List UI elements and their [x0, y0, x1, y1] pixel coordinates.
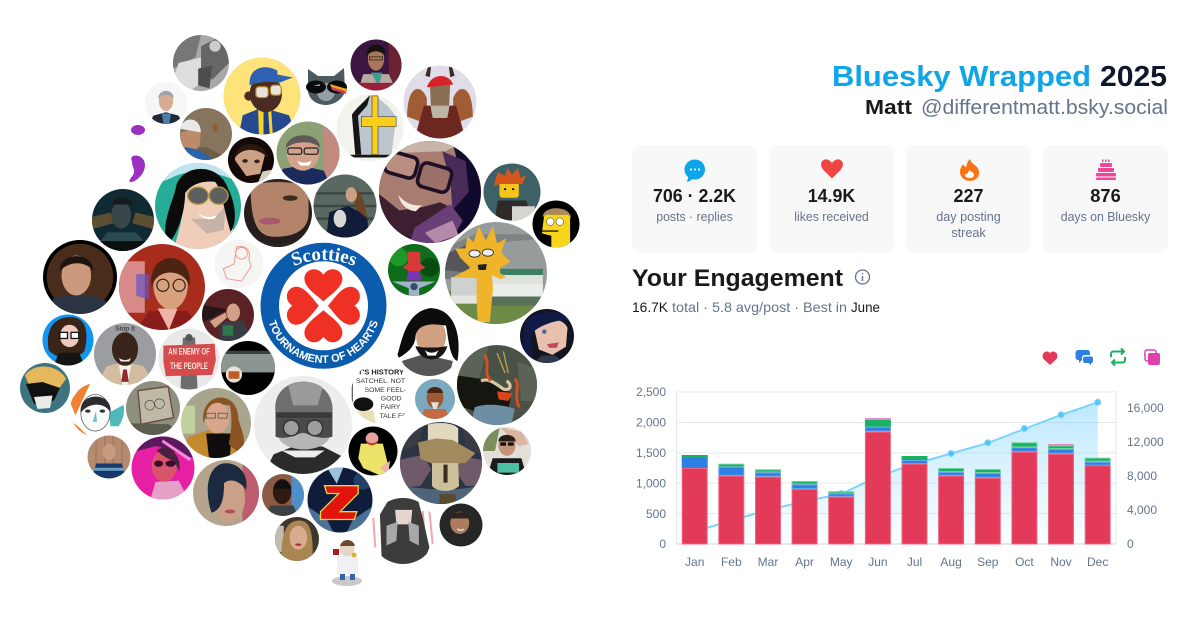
month labels: Oct: [1015, 555, 1034, 569]
icon: four red hearts: [287, 269, 360, 342]
title: Bluesky Wrapped: [832, 61, 1091, 93]
avatar: gray cat photo: [173, 35, 229, 91]
engagement summary: 16.7K: [632, 299, 669, 315]
panel: posting streak: [906, 145, 1031, 253]
avatar: long-haired bearded drawing: [395, 308, 463, 376]
cumulative area: [695, 402, 1098, 544]
right axis labels: 0: [1127, 537, 1134, 551]
avatar: comic panel text: GOOD: [381, 395, 402, 402]
avatar: man in heart sunglasses, pink light: [132, 436, 194, 500]
bar: Jun: [865, 418, 890, 544]
engagement summary: total · 5.8 avg/post · Best in: [672, 299, 847, 315]
avatar: comic panel text: SATCHEL. NOT: [356, 378, 405, 385]
avatar: cat with prism sunglasses: [306, 68, 347, 105]
right axis labels: 8,000: [1127, 469, 1157, 483]
avatar: comic panel text: FAIRY: [381, 404, 401, 411]
avatar: man on TV with glasses: [350, 40, 402, 90]
engagement summary: [632, 299, 880, 315]
panel: posts and replies: 706 · 2.2K: [653, 186, 736, 206]
right axis labels: 4,000: [1127, 503, 1157, 517]
icon: replies chat: [1076, 350, 1093, 365]
avatar: man in dark room with red: [202, 289, 254, 341]
month labels: Nov: [1050, 555, 1072, 569]
bar: Jan: [682, 456, 707, 544]
avatar: spiky yellow mascot and football team: [445, 222, 547, 324]
bar: Oct: [1012, 443, 1037, 544]
avatar: man in tan jacket painting: Stop It: [115, 325, 135, 332]
avatar: tiger robot: [20, 363, 70, 413]
icon: info: [856, 270, 870, 284]
icon: speech bubble: [684, 159, 705, 182]
avatar: comic panel text: IT'S HISTORY: [356, 367, 404, 376]
right axis labels: [1127, 401, 1164, 551]
avatar: lego figure: [484, 164, 540, 220]
left axis labels: 1,000: [636, 476, 666, 490]
avatar: woman on stone steps: [314, 174, 376, 238]
left axis labels: 1,500: [636, 446, 666, 460]
avatar cloud: [20, 35, 580, 586]
left axis labels: 2,500: [636, 385, 666, 399]
title: 2025: [1100, 61, 1167, 93]
avatar: person with blue-black hair: [193, 460, 259, 526]
avatar: Kronk cartoon with sunglasses: [155, 163, 241, 249]
panel: days on Bluesky: 876: [1090, 186, 1121, 206]
icon: quotes copy: [1145, 350, 1160, 365]
avatar: Simpsons-style man: [532, 200, 580, 248]
avatar: smiling man with glasses outdoors: [276, 122, 340, 184]
left axis labels: [636, 385, 666, 551]
icon: birthday cake: [1096, 160, 1116, 180]
Scotties Tournament of Hearts logo: TOURNAMENT OF HEARTS: [269, 320, 378, 363]
bar: Dec: [1085, 458, 1110, 544]
avatar: An Enemy of the People poster: [158, 328, 220, 390]
bar: Sep: [975, 470, 1000, 544]
user name and handle: @differentmatt.bsky.social: [921, 97, 1168, 119]
avatar: large smiling man with glasses: [379, 141, 481, 243]
bar: Mar: [756, 470, 780, 544]
panel: days on Bluesky: [1043, 145, 1168, 253]
month labels: Apr: [795, 555, 814, 569]
avatar: man with white helmet in field: [180, 108, 232, 160]
month labels: May: [830, 555, 853, 569]
avatar: woman close-up: [244, 179, 312, 247]
avatar: ape with Santa hat: [404, 66, 476, 138]
avatar: dark-skinned man selfie: [262, 474, 304, 516]
panel: posts and replies: posts · replies: [656, 210, 733, 224]
avatar: scientist figure: [332, 540, 362, 586]
avatar: gray-haired man: [145, 82, 187, 124]
panel: likes received: likes received: [794, 210, 869, 224]
avatar: man with round glasses on red: [119, 244, 205, 330]
panel: posts and replies: [632, 145, 757, 253]
avatar: man in leather helmet with goggles: [254, 376, 352, 474]
avatar: man in sunglasses with child: [483, 427, 531, 475]
user name and handle: Matt: [865, 97, 912, 119]
avatar: yellow cartoon man with cap: [224, 58, 300, 134]
month labels: Aug: [940, 555, 962, 569]
stacked bars: [682, 418, 1110, 544]
chart legend: [1043, 348, 1160, 366]
avatar: An Enemy of the People poster: THE PEOPLE: [170, 361, 208, 371]
avatar: green game sprite: [388, 244, 440, 296]
month labels: Mar: [758, 555, 778, 569]
avatar: red Z comic cover: [308, 468, 372, 532]
Scotties Tournament of Hearts logo: Scotties: [292, 248, 356, 266]
avatar: man in tan jacket painting: [94, 323, 156, 385]
avatar: red-haired woman with glasses: [181, 388, 251, 458]
heading: Your Engagement: Your Engagement: [632, 265, 843, 292]
avatar: bishop mitre: [336, 94, 404, 162]
left axis labels: 0: [659, 537, 666, 551]
left axis labels: 2,000: [636, 416, 666, 430]
avatar: comic panel text: SOME FEEL-: [365, 387, 406, 394]
avatar: dragon painting: [457, 345, 537, 425]
avatar: cartoon boy with orange stripes: [70, 383, 124, 437]
panel: days on Bluesky: days on Bluesky: [1061, 210, 1151, 224]
bar: Feb: [719, 464, 744, 544]
panel: posting streak: day posting: [936, 210, 1001, 224]
icon: likes heart: [1043, 351, 1057, 365]
avatar: man in blue jacket: [88, 436, 130, 478]
month labels: Feb: [721, 555, 742, 569]
engagement chart: [636, 385, 1164, 569]
icon: flame: [960, 159, 979, 181]
avatar: woman with cartoon glasses on blue: [42, 314, 94, 366]
right axis labels: 12,000: [1127, 435, 1164, 449]
avatar: thin man dark background: [228, 137, 274, 183]
avatar: yellow cartoon on black: [348, 426, 398, 476]
month labels: Jul: [907, 555, 922, 569]
bar: May: [829, 492, 854, 544]
bar: Nov: [1048, 444, 1074, 544]
month labels: Jan: [685, 555, 704, 569]
avatar: man in dark car: [92, 189, 154, 251]
avatar: man in dark shirt: [440, 504, 482, 546]
engagement summary: June: [851, 299, 880, 315]
avatar: comic panel text: TALE FOR: [380, 413, 412, 420]
left axis labels: 500: [646, 507, 666, 521]
Scotties Tournament of Hearts logo: [260, 242, 386, 369]
cumulative line: [695, 402, 1098, 532]
line points: [838, 399, 1101, 496]
panel: posting streak: streak: [951, 226, 987, 240]
panel: posting streak: 227: [954, 186, 984, 206]
panel: likes received: [769, 145, 894, 253]
avatar: smiling man with black ring: [43, 240, 117, 314]
avatar: hooded figure sketch: [370, 498, 436, 564]
bar: Aug: [939, 468, 964, 544]
avatar: sketch framed picture: [126, 381, 180, 435]
right axis labels: 16,000: [1127, 401, 1164, 415]
month labels: Dec: [1087, 555, 1108, 569]
grid lines: [676, 392, 1116, 544]
avatar: An Enemy of the People poster: AN ENEMY OF: [168, 347, 210, 357]
bar: Apr: [792, 482, 817, 544]
avatar: boy with milk beard: [415, 379, 455, 419]
avatar: red pencil sketch: [214, 240, 264, 288]
bar: Jul: [902, 456, 927, 544]
icon: purple semicolon avatar: [130, 125, 145, 182]
icon: heart: [821, 159, 843, 178]
avatar: black square with ice rink: [221, 341, 275, 395]
panel: likes received: 14.9K: [808, 186, 855, 206]
avatar: woman with dark blue hair: [520, 309, 574, 363]
avatar: comic panel text: [352, 370, 406, 424]
avatar: woman portrait: [275, 517, 319, 561]
month labels: [685, 555, 1108, 569]
icon: repost arrows: [1111, 348, 1125, 366]
month labels: Jun: [868, 555, 888, 569]
month labels: Sep: [977, 555, 999, 569]
avatar: skull sculpture: [400, 422, 482, 504]
